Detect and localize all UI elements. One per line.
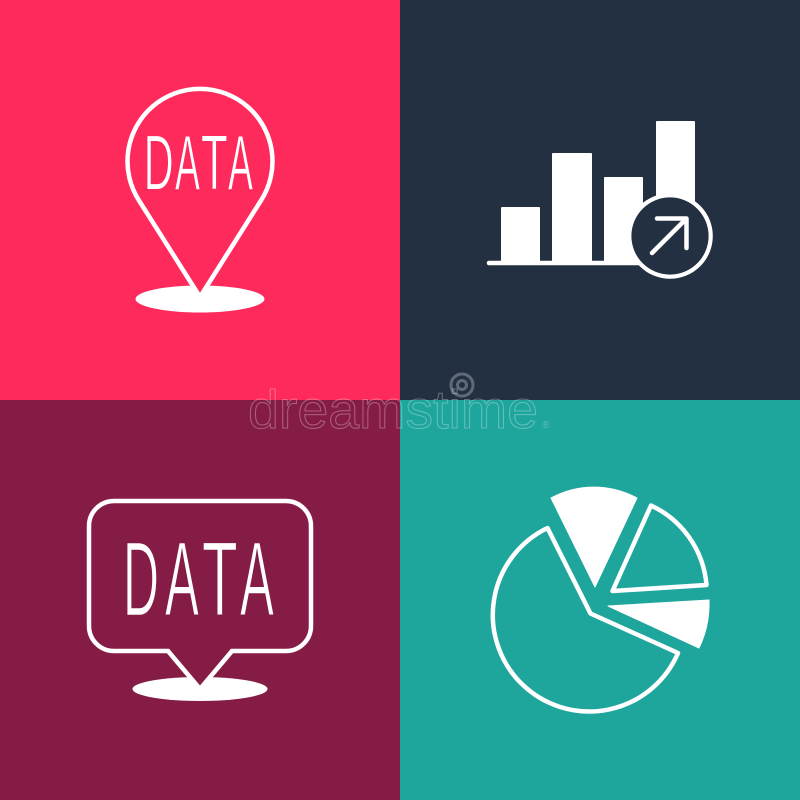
panel: navy bar chart: [400, 0, 800, 400]
icon: speech bubble outline: [89, 501, 311, 689]
text: DATA in bubble: A: [165, 520, 199, 638]
text: DATA in pin: A: [228, 119, 253, 206]
text: DATA in pin: D: [144, 120, 174, 207]
icon: watermark spiral: [451, 374, 473, 396]
icon: arrow badge: [629, 195, 711, 277]
text: DATA in pin: [144, 119, 253, 207]
text: watermark wordmark: dreamstime: [248, 380, 538, 440]
icon: pin shadow ellipse: [136, 286, 264, 312]
chart: bars: [501, 121, 695, 263]
chart: filled top slice: [551, 487, 637, 587]
panel: maroon speech bubble: [0, 400, 400, 800]
chart: large outlined slice: [493, 528, 678, 711]
text: DATA in bubble: A: [240, 520, 274, 638]
icon: pin outline: [128, 89, 272, 297]
text: DATA in bubble: T: [202, 521, 238, 639]
chart: outlined right slice: [612, 506, 706, 591]
text: DATA in pin: A: [175, 119, 200, 206]
text: DATA in bubble: [123, 520, 274, 639]
text: DATA in bubble: D: [123, 520, 159, 639]
text: watermark registered mark: ®: [542, 420, 550, 431]
chart: filled bottom slice: [608, 600, 709, 648]
panel: teal pie chart: [400, 400, 800, 800]
icon: bubble shadow ellipse: [132, 677, 268, 701]
panel: red location pin: [0, 0, 400, 400]
watermark: [248, 374, 550, 440]
text: DATA in pin: T: [201, 120, 228, 207]
chart: baseline: [489, 261, 650, 265]
